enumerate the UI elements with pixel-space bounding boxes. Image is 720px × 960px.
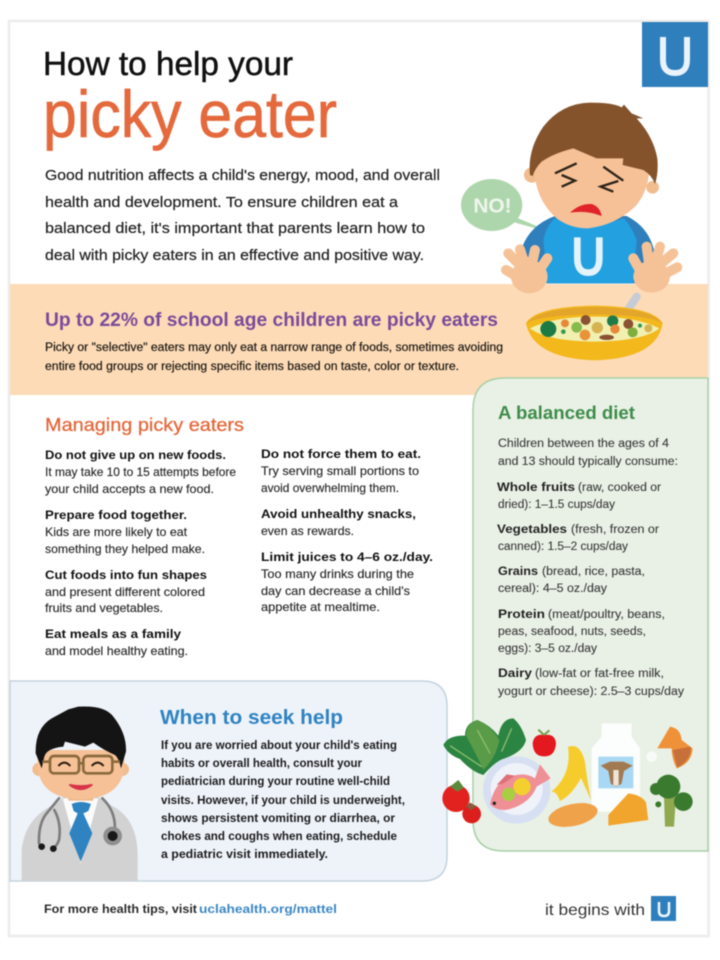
panel: a balanced diet: (meat/poultry, beans,	[548, 609, 665, 621]
tips: right column: Too many drinks during the	[261, 567, 414, 581]
tips: left column: something they helped make.	[45, 542, 205, 556]
panel: a balanced diet: eggs): 3–5 oz./day	[498, 643, 597, 655]
intro text: health and development. To ensure children eat a	[45, 195, 399, 211]
heading: when to seek help: When to seek help	[160, 707, 343, 729]
tips: right column: appetite at mealtime.	[261, 600, 380, 614]
heading: managing picky eaters: Managing picky eaters	[45, 415, 244, 435]
panel: a balanced diet: peas, seafood, nuts, seeds,	[498, 626, 646, 638]
tips: right column: Avoid unhealthy snacks,	[261, 507, 416, 521]
tips: right column: avoid overwhelming them.	[261, 481, 399, 495]
tips: right column: even as rewards.	[261, 524, 354, 538]
panel: when to seek help: If you are worried about your child's eating	[161, 740, 397, 752]
icon: fish on plate	[483, 756, 551, 824]
tips: left column: fruits and vegetables.	[45, 601, 163, 615]
title accent: picky eater: picky eater	[43, 77, 337, 151]
panel: a balanced diet: cereal): 4–5 oz./day	[498, 583, 607, 595]
panel: a balanced diet: Grains	[498, 566, 538, 578]
icon: banana	[551, 746, 591, 801]
illustration: doctor	[22, 706, 138, 881]
tips: left column: your child accepts a new food.	[45, 482, 214, 496]
tips: left column: Eat meals as a family	[45, 627, 181, 641]
title	[43, 45, 337, 151]
heading: statistic: Up to 22% of school age children are picky eaters	[45, 310, 498, 331]
icon: broccoli	[650, 775, 693, 827]
right hand	[633, 247, 677, 277]
panel: when to seek help: shows persistent vomiting or diarrhea, or	[161, 813, 396, 825]
tips: right column	[261, 447, 433, 614]
left hand	[506, 249, 547, 278]
panel: a balanced diet: Vegetables	[497, 524, 567, 536]
intro text: Good nutrition affects a child's energy, mood, and overall	[45, 168, 440, 184]
illustration: healthy foods left group	[442, 718, 556, 824]
tips: left column: and present different colored	[45, 585, 205, 599]
tips: left column	[45, 448, 236, 658]
tips: left column: Prepare food together.	[45, 508, 187, 522]
illustration: bowl of food	[526, 297, 663, 360]
panel: when to seek help: visits. However, if your child is underweight,	[161, 795, 405, 807]
panel: orange statistic band	[10, 284, 708, 395]
footer link text	[44, 902, 337, 916]
icon: grilled steak	[657, 727, 693, 768]
panel: a balanced diet: Whole fruits	[497, 482, 575, 494]
panel: a balanced diet: and 13 should typically consume:	[498, 456, 678, 468]
panel: a balanced diet: (bread, rice, pasta,	[542, 566, 645, 578]
panel: a balanced diet: (low-fat or fat-free milk,	[535, 668, 664, 680]
panel: a balanced diet: Protein	[498, 609, 545, 621]
tips: right column: Limit juices to 4–6 oz./day.	[261, 550, 433, 564]
footer tagline with logo	[545, 896, 676, 921]
footer link text: uclahealth.org/mattel	[199, 902, 337, 916]
panel: when to seek help: a pediatric visit immediately.	[161, 849, 328, 861]
tips: right column: day can decrease a child's	[261, 584, 410, 598]
icon: cheese	[608, 793, 648, 826]
illustration: boy refusing food	[461, 103, 677, 293]
panel: a balanced diet	[473, 378, 708, 851]
icon: milk bottle	[592, 723, 657, 812]
panel: a balanced diet: yogurt or cheese): 2.5–3 cups/day	[498, 686, 684, 698]
panel: when to seek help: pediatrician during your routine well-child	[161, 776, 390, 788]
tips: right column: Try serving small portions to	[261, 464, 419, 478]
panel: when to seek help: habits or overall health, consult your	[161, 758, 363, 770]
panel: a balanced diet: (fresh, frozen or	[571, 524, 659, 536]
heading: a balanced diet: A balanced diet	[498, 403, 635, 423]
icon: lettuce	[443, 718, 526, 775]
footer link text: For more health tips, visit	[44, 902, 197, 916]
panel: a balanced diet: Dairy	[498, 668, 533, 680]
speech bubble: NO!: NO!	[473, 196, 512, 218]
panel: when to seek help: chokes and coughs when eating, schedule	[161, 831, 397, 843]
icon: apple	[533, 730, 556, 756]
tips: right column: Do not force them to eat.	[261, 447, 421, 461]
intro text: deal with picky eaters in an effective and positive way.	[45, 248, 424, 264]
title: How to help your	[43, 45, 293, 82]
panel: a balanced diet: dried): 1–1.5 cups/day	[498, 499, 615, 511]
speech bubble: NO!	[461, 179, 547, 232]
panel: a balanced diet: (raw, cooked or	[578, 482, 661, 494]
logo: U badge	[642, 22, 708, 87]
illustration: healthy foods right group	[592, 723, 693, 827]
panel: when to seek help	[10, 681, 447, 881]
tips: left column: Cut foods into fun shapes	[45, 568, 207, 582]
panel: orange statistic band: entire food groups or rejecting specific items based on taste, color or texture.	[45, 361, 459, 373]
tips: left column: Do not give up on new foods.	[45, 448, 226, 462]
intro text: balanced diet, it's important that parents learn how to	[45, 221, 425, 237]
tips: left column: Kids are more likely to eat	[45, 525, 188, 539]
intro text	[45, 168, 440, 264]
icon: bread	[546, 799, 600, 831]
panel: a balanced diet: Children between the ages of 4	[498, 438, 670, 450]
panel: orange statistic band: Picky or "selective" eaters may only eat a narrow range of foods, sometimes avoiding	[45, 342, 503, 354]
panel: a balanced diet: canned): 1.5–2 cups/day	[498, 541, 628, 553]
tips: left column: It may take 10 to 15 attempts before	[45, 465, 236, 479]
footer tagline with logo: it begins with	[545, 902, 645, 919]
tips: left column: and model healthy eating.	[45, 644, 188, 658]
icon: tomatoes	[442, 780, 481, 823]
